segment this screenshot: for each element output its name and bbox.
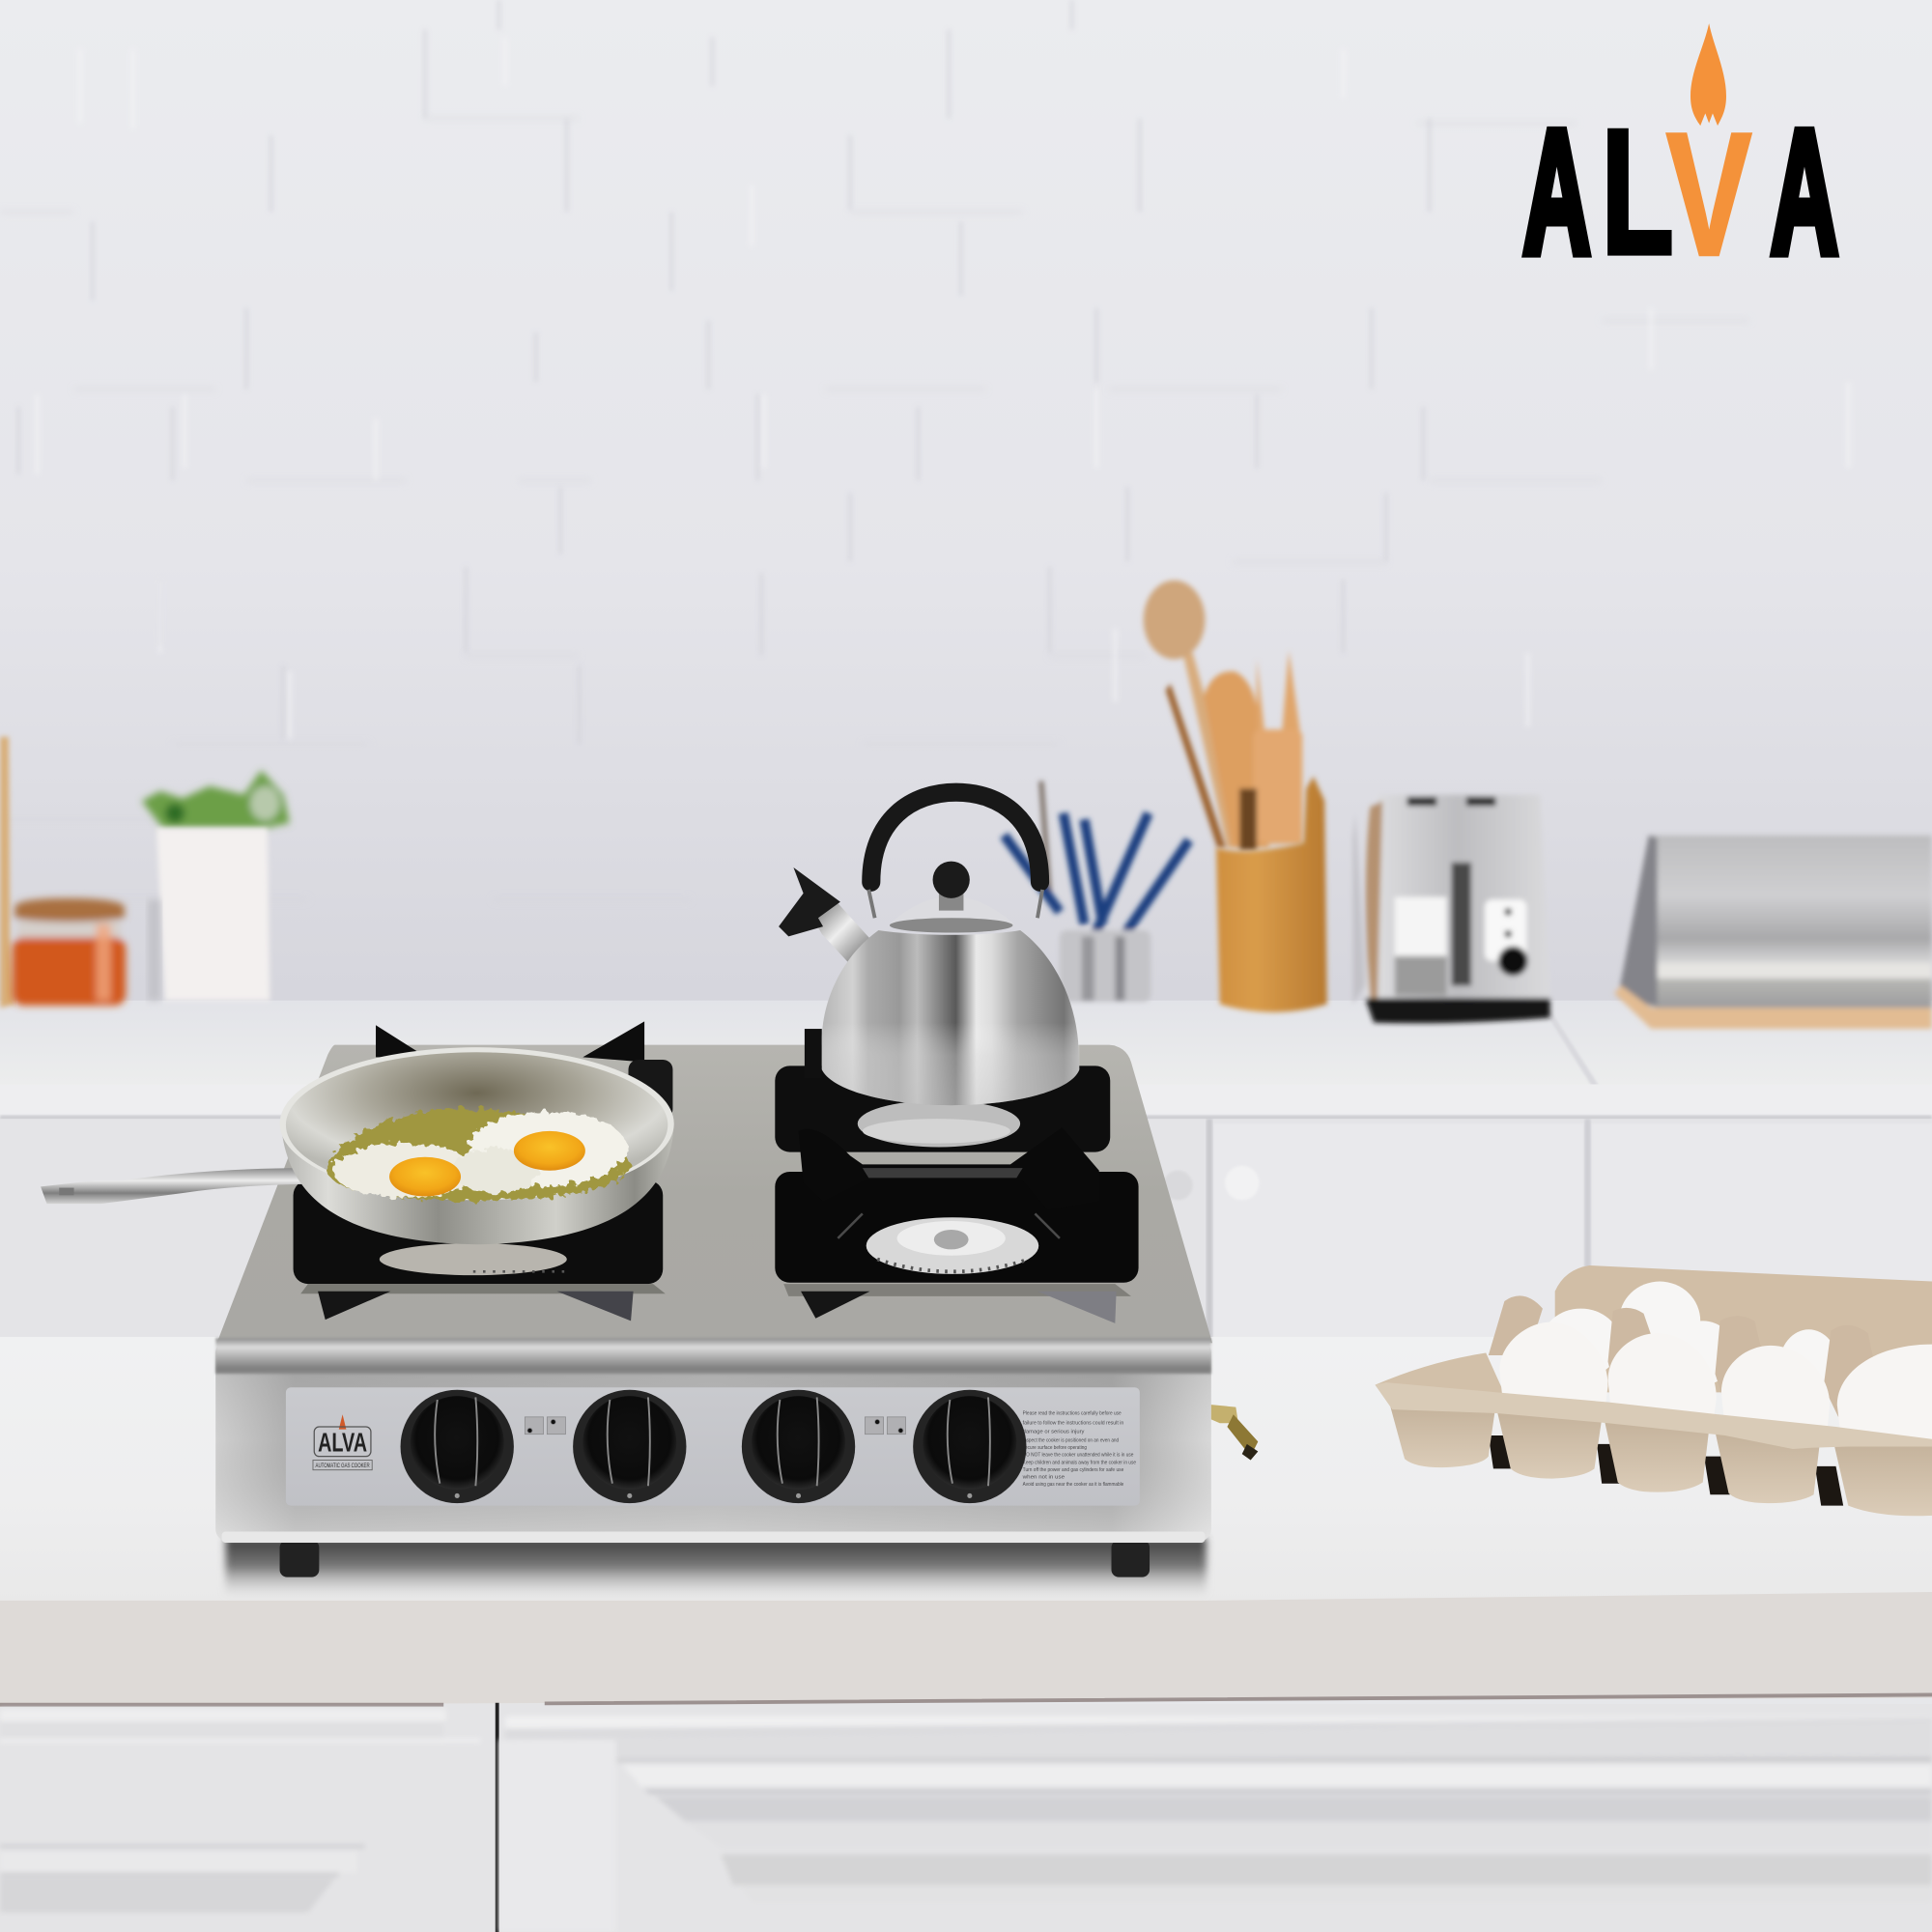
front worktop — [0, 1337, 1932, 1705]
kettle handle — [868, 792, 1042, 918]
left utensil — [0, 737, 14, 1008]
burner: front left — [294, 1180, 666, 1321]
kettle lid — [890, 862, 1014, 933]
bread box — [1614, 836, 1932, 1029]
stove feet — [280, 1540, 1150, 1577]
pan body — [281, 1123, 674, 1244]
safety instructions: DO NOT leave the cooker unattended while it is in use — [1023, 1453, 1133, 1459]
toaster — [1353, 795, 1550, 1023]
kettle — [779, 792, 1079, 1105]
safety instructions: when not in use — [1022, 1475, 1065, 1481]
door: left — [0, 1709, 480, 1913]
knob 2 — [573, 1390, 686, 1503]
egg yolks — [389, 1131, 585, 1197]
safety instructions: damage or serious injury — [1023, 1429, 1085, 1435]
safety instructions: Keep children and animals away from the cooker in use — [1023, 1460, 1136, 1465]
plant pot — [142, 770, 290, 1001]
safety instructions: Avoid using gas near the cooker as it is flammable — [1023, 1482, 1123, 1488]
upper cabinet doors — [0, 1119, 1932, 1341]
logo flame — [1690, 23, 1726, 126]
gas stove — [215, 1021, 1258, 1577]
bottom rim — [222, 1531, 1205, 1543]
cooktop plate — [216, 1045, 1212, 1343]
safety instructions: secure surface before operating — [1023, 1445, 1087, 1451]
burner: back left — [376, 1021, 672, 1119]
control knobs — [401, 1390, 1027, 1503]
blue utensils in glass — [1005, 781, 1189, 1002]
logo wordmark: V — [1665, 96, 1752, 293]
door: right — [499, 1717, 1932, 1932]
pan handle — [41, 1168, 308, 1204]
egg carton — [1375, 1265, 1932, 1516]
back worktop — [0, 1001, 1932, 1122]
burner symbols — [525, 1417, 906, 1435]
panel logo — [313, 1414, 372, 1470]
wooden utensils and holder — [1144, 581, 1327, 1012]
carton posts — [1489, 1295, 1875, 1417]
brick wall background — [0, 0, 1932, 1023]
brass gas inlet — [1211, 1405, 1258, 1460]
carton dark gaps — [1489, 1435, 1843, 1506]
oil — [327, 1109, 631, 1202]
logo wordmark: L — [1602, 93, 1673, 290]
stove shadow — [225, 1538, 1207, 1595]
top bend band — [215, 1338, 1211, 1374]
carton cups — [1390, 1405, 1932, 1516]
knob 1 — [401, 1390, 514, 1503]
safety instructions: Turn off the power and gas cylinders for safe use — [1023, 1467, 1123, 1473]
kettle spout — [779, 867, 873, 967]
spice jar — [13, 898, 126, 1006]
knob 3 — [742, 1390, 855, 1503]
front eggs — [1499, 1322, 1932, 1448]
safety instructions — [1022, 1410, 1136, 1488]
logo wordmark — [1523, 93, 1838, 293]
safety instructions: Please read the instructions carefully before use — [1023, 1410, 1122, 1416]
carton lid — [1555, 1265, 1932, 1392]
burner: front right — [775, 1127, 1139, 1323]
carton rim — [1375, 1382, 1932, 1449]
carton left tray — [1375, 1353, 1509, 1405]
safety instructions: Inspect the cooker is positioned on an even and — [1023, 1437, 1119, 1443]
panel logo: ALVA — [318, 1428, 367, 1458]
panel logo: AUTOMATIC GAS COOKER — [316, 1463, 370, 1469]
back eggs — [1542, 1282, 1838, 1401]
control panel — [286, 1387, 1140, 1506]
safety instructions: failure to follow the instructions could result in — [1023, 1420, 1123, 1426]
burner: back right — [775, 1029, 1110, 1152]
frying pan with eggs — [41, 1047, 674, 1244]
pan rim — [280, 1047, 674, 1200]
egg whites — [332, 1112, 627, 1198]
front fascia — [215, 1341, 1211, 1542]
logo wordmark: A — [1771, 93, 1838, 290]
logo wordmark: A — [1523, 93, 1591, 290]
lower cabinet doors — [0, 1693, 1932, 1932]
kettle body — [822, 930, 1079, 1105]
knob 4 — [913, 1390, 1026, 1503]
ALVA logo — [1523, 23, 1838, 293]
